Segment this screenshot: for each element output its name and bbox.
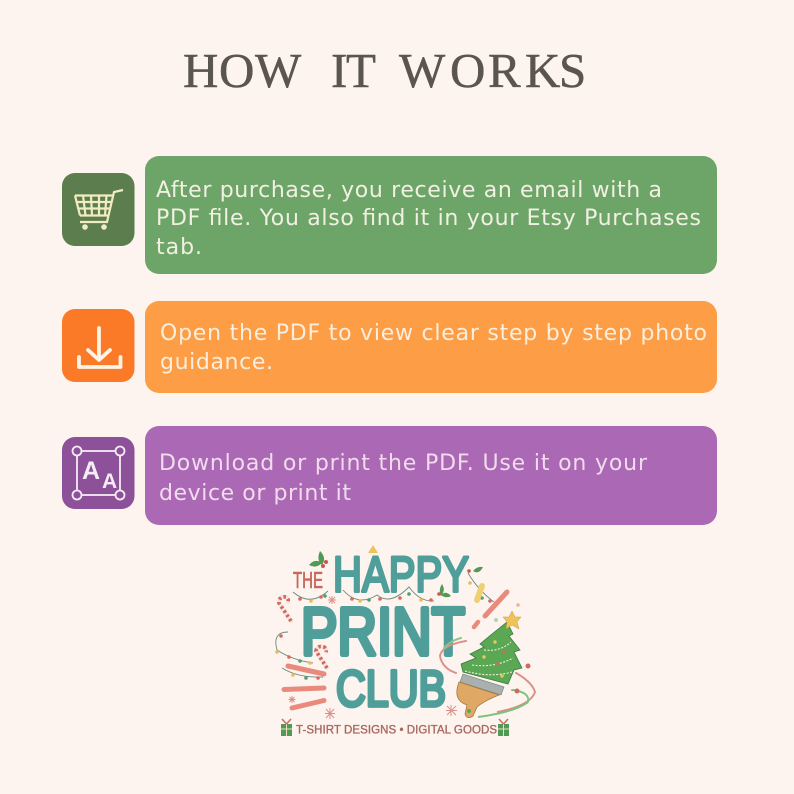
text box: step 2: guidance. [160, 350, 273, 375]
icon: star on top of A [368, 545, 378, 553]
text box: step 2 [145, 301, 717, 393]
icon: holly right [467, 567, 483, 573]
text box: step 3 [145, 426, 717, 525]
text box: step 1 [145, 156, 717, 274]
panel: step 2 [62, 301, 717, 393]
text box: step 3: Download or print the PDF. Use it on your [159, 451, 648, 476]
title: HOW IT WORKS [183, 43, 586, 98]
icon: shopping cart [62, 173, 134, 246]
icon: snowflakes [288, 596, 457, 719]
icon: holly top left [309, 551, 328, 568]
icon: string lights [275, 573, 494, 680]
logo wordmark [293, 546, 469, 717]
icon: text frame: A [102, 470, 117, 493]
tagline: T-SHIRT DESIGNS • DIGITAL GOODS [296, 724, 497, 736]
icon: download [62, 309, 134, 382]
logo wordmark: PRINT [301, 594, 465, 670]
logo wordmark: HAPPY [333, 546, 469, 602]
icon: gift right [498, 719, 509, 736]
text box: step 3: device or print it [159, 481, 351, 506]
logo [275, 545, 535, 736]
icon: candy canes [279, 597, 327, 668]
logo wordmark: CLUB [336, 660, 446, 717]
panel: step 3 [62, 426, 717, 525]
text box: step 1: PDF file. You also find it in your Etsy Purchases [156, 206, 701, 231]
icon: gift left [281, 719, 292, 736]
icon: holly middle [437, 584, 451, 597]
icon: paint strokes [284, 586, 507, 708]
text box: step 2: Open the PDF to view clear step by step photo [160, 321, 707, 346]
icon: text frame: A [82, 457, 100, 485]
icon: sparkle swirls [440, 603, 535, 717]
text box: step 1: After purchase, you receive an email with a [156, 178, 662, 203]
icon: christmas tree paintbrush [457, 611, 522, 718]
logo wordmark: THE [293, 567, 323, 593]
text box: step 1: tab. [156, 235, 202, 260]
icon: text frame [62, 437, 134, 509]
panel: step 1 [62, 156, 717, 274]
